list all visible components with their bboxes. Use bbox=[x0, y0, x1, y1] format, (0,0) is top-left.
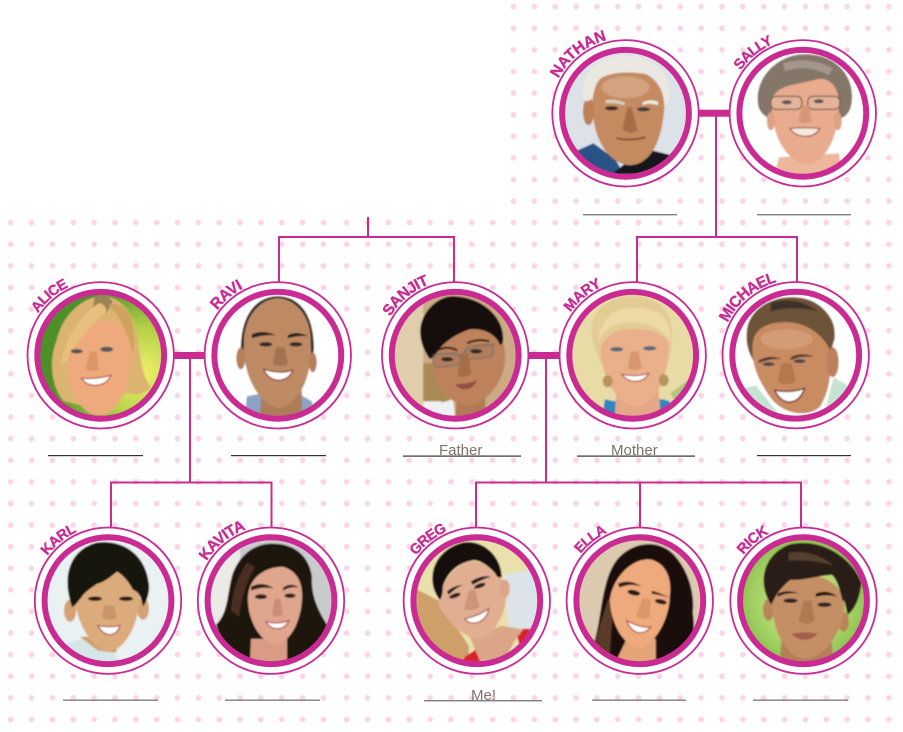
photo bbox=[416, 540, 538, 662]
ring bbox=[567, 528, 713, 674]
photo bbox=[742, 540, 864, 662]
name: SANJIT bbox=[382, 274, 426, 316]
photo bbox=[735, 294, 857, 416]
ring bbox=[404, 528, 550, 674]
photo bbox=[40, 294, 162, 416]
person: Karl bbox=[34, 525, 182, 675]
label: Mother: Mother bbox=[611, 442, 658, 459]
name: NATHAN bbox=[550, 30, 606, 78]
person: Ella bbox=[566, 526, 714, 675]
name: SALLY bbox=[734, 34, 770, 69]
photo bbox=[572, 294, 694, 416]
person: Alice bbox=[26, 278, 175, 430]
label: Me!: Me! bbox=[471, 687, 496, 704]
photo bbox=[217, 294, 339, 416]
connector lines bbox=[110, 110, 802, 527]
person: Michael bbox=[718, 274, 870, 430]
name: KAVITA bbox=[198, 521, 246, 560]
ring bbox=[730, 40, 876, 186]
ring bbox=[730, 528, 877, 674]
ring bbox=[198, 528, 344, 674]
person: Mary bbox=[558, 277, 707, 430]
person: Kavita bbox=[196, 521, 346, 675]
name: MARY bbox=[563, 277, 598, 312]
name: GREG bbox=[410, 524, 446, 554]
photo bbox=[579, 540, 701, 662]
person: Greg bbox=[402, 524, 551, 675]
ring bbox=[28, 282, 174, 428]
ring bbox=[382, 282, 528, 428]
ring bbox=[722, 282, 869, 428]
person: Sanjit bbox=[381, 274, 530, 430]
ring bbox=[552, 40, 699, 186]
photo bbox=[742, 52, 864, 174]
ring bbox=[35, 528, 181, 674]
name: RICK bbox=[736, 524, 770, 554]
person: Sally bbox=[728, 34, 877, 188]
name: RAVI bbox=[209, 279, 242, 310]
name: KARL bbox=[40, 525, 77, 556]
photo bbox=[210, 540, 332, 662]
person: Ravi bbox=[204, 279, 352, 430]
label: Father: Father bbox=[439, 442, 482, 459]
person: Nathan bbox=[550, 30, 700, 188]
name: ELLA bbox=[574, 526, 607, 554]
name: ALICE bbox=[32, 278, 68, 314]
photo bbox=[47, 540, 169, 662]
answer lines and labels bbox=[48, 214, 851, 704]
person: Rick bbox=[729, 524, 878, 675]
ring bbox=[560, 282, 706, 428]
ring bbox=[205, 282, 351, 428]
photo bbox=[394, 294, 516, 416]
photo bbox=[564, 52, 686, 174]
name: MICHAEL bbox=[718, 274, 777, 322]
